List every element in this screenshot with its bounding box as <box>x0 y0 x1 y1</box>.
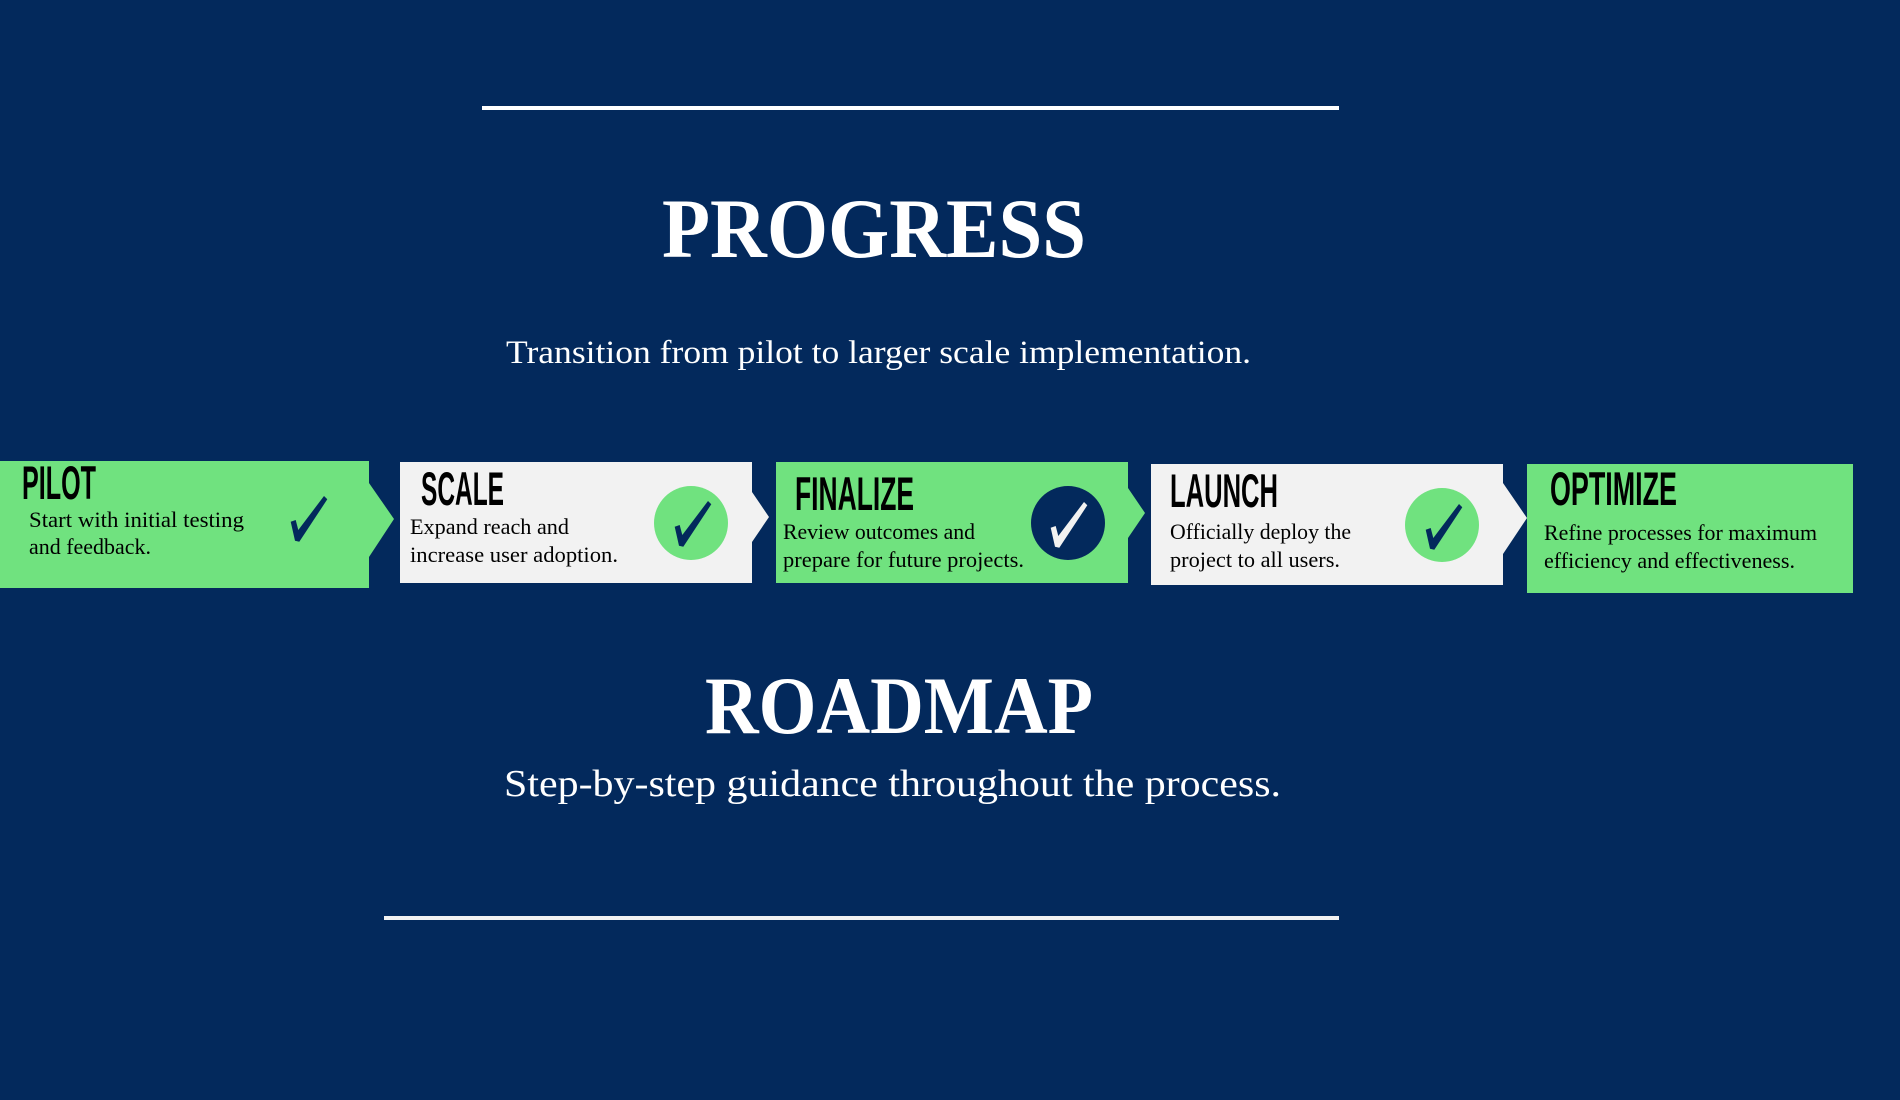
finalize description: prepare for future projects. <box>783 547 1024 572</box>
scale description <box>410 514 618 567</box>
finalize description: Review outcomes and <box>783 519 975 544</box>
title: roadmap: ROADMAP <box>705 660 1093 751</box>
icon: launch check badge <box>1405 488 1479 562</box>
pilot heading: PILOT <box>22 456 96 509</box>
launch description: Officially deploy the <box>1170 519 1351 544</box>
step: finalize <box>776 462 1145 583</box>
finalize heading: FINALIZE <box>795 467 914 520</box>
pilot description <box>29 507 244 559</box>
finalize description <box>783 519 1024 572</box>
step: scale <box>400 462 769 583</box>
pilot description: and feedback. <box>29 534 151 559</box>
title: progress: PROGRESS <box>662 182 1086 276</box>
icon: pilot check mark <box>291 496 327 542</box>
launch description: project to all users. <box>1170 547 1340 572</box>
icon: scale check badge <box>654 486 728 560</box>
step: optimize <box>1527 462 1853 593</box>
subtitle: transition: Transition from pilot to larger scale implementation. <box>506 335 1251 371</box>
step: launch <box>1151 464 1527 585</box>
pilot description: Start with initial testing <box>29 507 244 532</box>
optimize description <box>1544 520 1817 573</box>
icon: finalize check badge <box>1031 486 1105 560</box>
launch description <box>1170 519 1351 572</box>
optimize description: efficiency and effectiveness. <box>1544 548 1795 573</box>
subtitle: guidance: Step-by-step guidance throughout the process. <box>504 763 1281 805</box>
scale description: Expand reach and <box>410 514 569 539</box>
step: pilot <box>0 456 394 588</box>
optimize description: Refine processes for maximum <box>1544 520 1817 545</box>
launch heading: LAUNCH <box>1170 464 1278 517</box>
scale heading: SCALE <box>421 462 504 515</box>
scale description: increase user adoption. <box>410 542 618 567</box>
optimize heading: OPTIMIZE <box>1550 462 1677 515</box>
